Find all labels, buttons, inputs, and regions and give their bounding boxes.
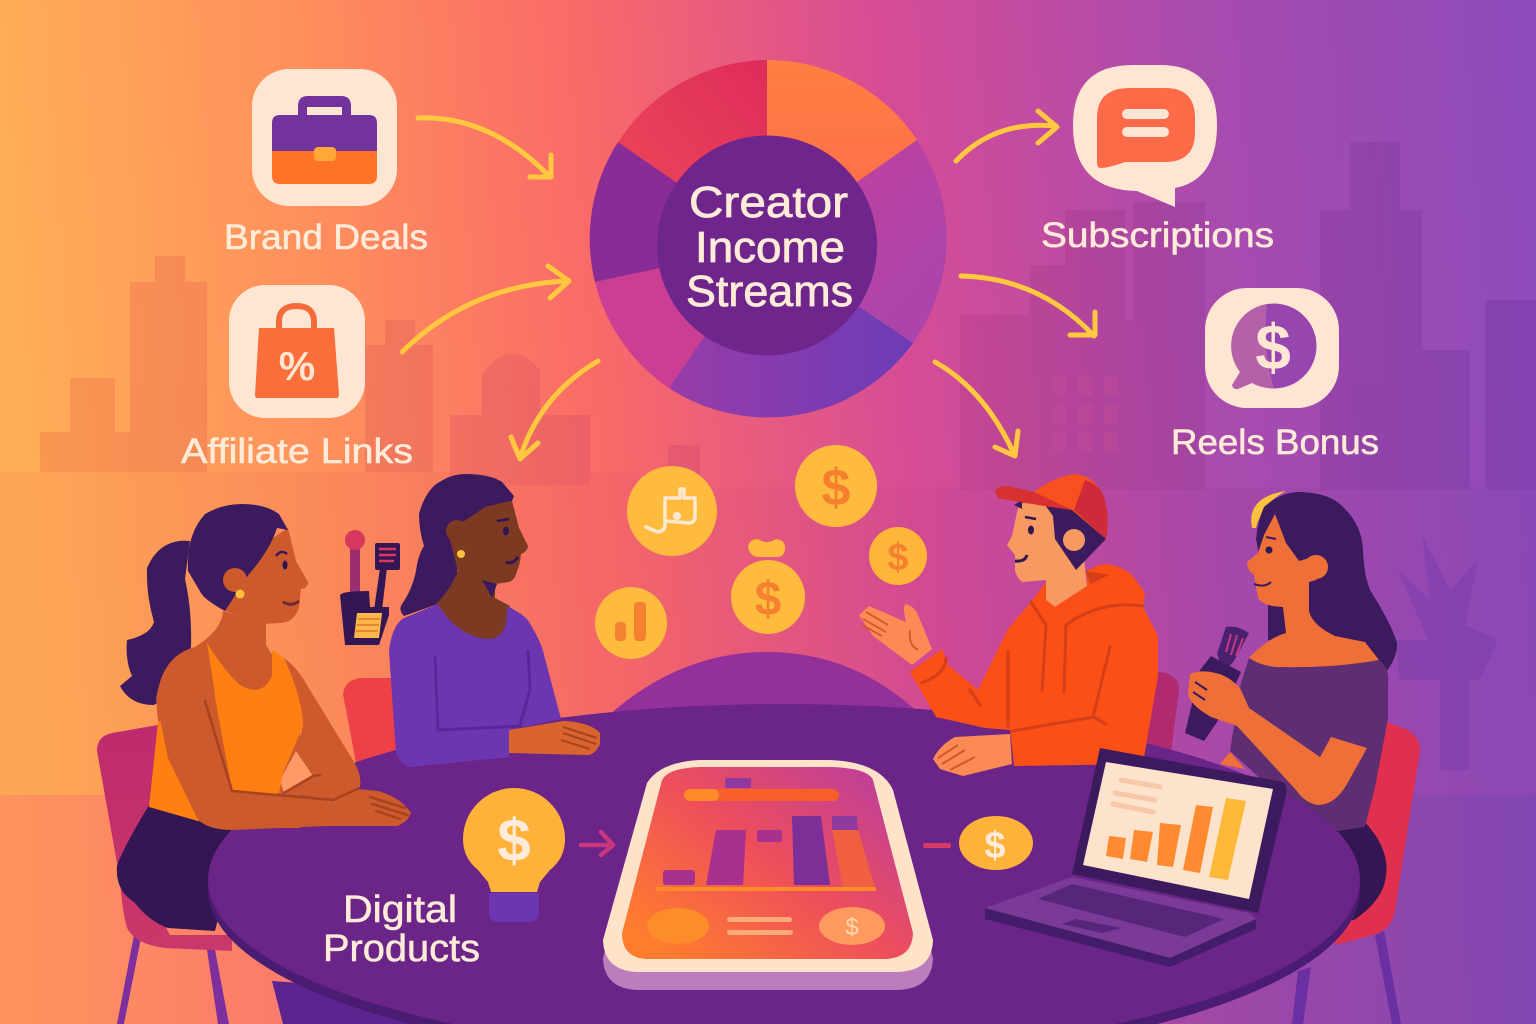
chair: left [97,722,232,1024]
neck and chest [1247,514,1379,667]
neck shadow [482,580,497,598]
coin: dollar large [795,445,877,527]
arrow: bulb to tablet [581,832,613,855]
crescent hair clip [1251,491,1286,528]
pants [1320,822,1387,920]
arm [1188,671,1367,805]
coin: dollar small: $ [887,537,909,579]
hair [400,474,514,616]
resting hand [933,734,1012,776]
coin: music note [627,466,717,556]
icon: lightbulb dollar: $ [497,807,531,874]
hand [509,721,600,755]
coin: oval dollar: $ [984,825,1006,867]
dashboard bars [663,870,695,885]
icon: speech bubble [1073,65,1217,207]
coin: dollar small [869,527,927,585]
body [157,611,300,828]
dashboard footer [647,908,709,944]
label: Affiliate Links: Affiliate Links [181,432,413,471]
lid [1072,748,1287,913]
face details [282,560,288,570]
woman left skirt [117,805,240,931]
background plant silhouette [1395,535,1498,770]
tablet with dashboard: $ [845,914,859,941]
arrows [402,111,1095,459]
hoodie [910,564,1158,766]
cap [1034,474,1108,539]
icon: dollar bubble [1205,288,1339,408]
dashboard header [684,789,839,801]
coin: money bag [731,539,805,634]
hair top [188,504,288,611]
face details [1028,526,1034,534]
tablet with dashboard [603,760,933,990]
icon: briefcase [252,69,397,206]
coin: bar chart [595,587,667,659]
keyboard [1038,884,1224,937]
coin: dollar large: $ [822,459,851,517]
icon: shopping bag [229,285,365,418]
laptop base [985,877,1256,958]
dome behind table [608,652,922,716]
ear [1063,529,1085,551]
round table [208,704,1360,1024]
city skyline silhouette [0,142,1536,795]
person: man in red cap and hoodie [859,474,1158,776]
face details [1266,546,1272,554]
near arm [156,647,411,830]
label: Reels Bonus: Reels Bonus [1171,423,1379,462]
arrow: chart to reels bonus [961,276,1095,336]
coin: money bag: $ [755,573,782,626]
tablet bezel [603,760,933,972]
silhouette windows [1052,376,1118,452]
donut chart: income streams [590,60,946,417]
tank top [149,643,303,821]
microphone [1185,627,1249,741]
icon: dollar bubble: $ [1255,311,1291,383]
trackpad [1062,919,1121,933]
arrow: chart to subscriptions [956,111,1057,161]
arrow: chart to people left [511,361,598,459]
sweater [389,604,561,767]
title: Income [695,223,845,272]
face [225,528,308,624]
connector dash [923,843,951,848]
top [1230,658,1388,832]
coin: oval dollar [959,816,1033,870]
face and neck [436,501,528,645]
tablet screen [622,767,913,959]
donut centre [657,136,877,356]
arrow: chart to people right [935,362,1018,456]
desk props: microphone and clipboard stand [340,530,400,645]
label: Digital Products: Digital [343,889,457,931]
tablet base [603,778,933,990]
person: right woman with microphone [1185,491,1397,920]
icon: shopping bag: % [279,343,315,389]
person: woman in purple top [389,474,600,767]
hair [1256,492,1397,679]
label: Subscriptions: Subscriptions [1041,216,1274,255]
screen [1083,762,1273,899]
woman left ponytail [120,541,191,705]
icon: lightbulb dollar [463,788,565,922]
gap between arm and torso [280,751,313,793]
face and neck [1007,503,1087,607]
ear and earring [446,520,468,542]
floating coins [595,445,927,659]
far arm [284,658,360,800]
shoulder behind laptop [1220,752,1245,769]
face details [503,526,509,536]
laptop [985,748,1287,967]
laptop lip [985,908,1256,967]
title: Streams [686,267,853,316]
raised hand [859,604,932,665]
chair: right [1292,721,1420,1024]
screen text lines [1113,780,1160,812]
arrow: affiliate links to chart [402,266,569,352]
arrow: brand deals to chart [418,118,551,177]
ear and earring [223,568,247,592]
label: Brand Deals: Brand Deals [224,218,428,257]
title: Creator [689,178,848,227]
hair [1014,500,1106,570]
bars [1106,836,1126,859]
chair: behind purple-top woman [343,678,400,768]
person: left woman in orange top [149,504,411,830]
label: Digital Products: Products [323,928,480,970]
floor band [0,795,1536,1024]
chair: behind hoodie man [1140,672,1179,765]
